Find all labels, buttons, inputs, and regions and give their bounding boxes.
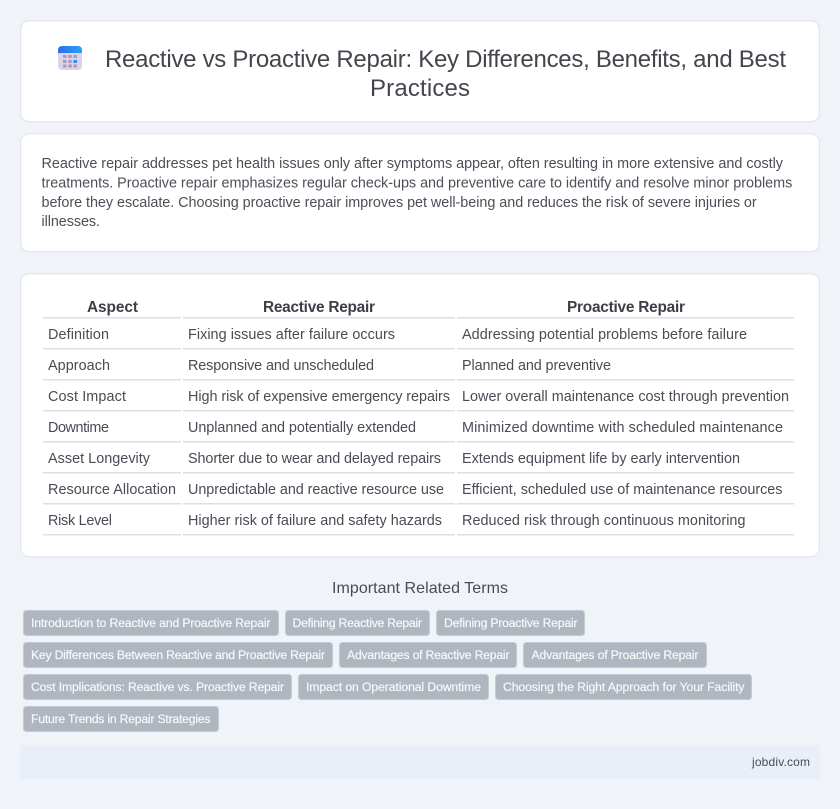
text block: introduction: before they escalate. Choosing proactive repair improves pet well-being and reduces the risk of severe injuries or — [42, 195, 757, 211]
table row: risk level: Higher risk of failure and safety hazards — [188, 513, 442, 529]
tag: Choosing the Right Approach for Your Facility — [503, 680, 745, 694]
text block: introduction — [42, 156, 792, 230]
tag — [24, 706, 218, 732]
table row: downtime: Unplanned and potentially extended — [188, 420, 416, 436]
title — [105, 46, 786, 102]
tag: Advantages of Reactive Repair — [347, 648, 510, 662]
table row: asset longevity — [48, 451, 740, 467]
table row: approach: Approach — [48, 358, 110, 374]
table header row: Proactive Repair — [567, 299, 685, 316]
table row: resource allocation — [48, 482, 782, 498]
table row: approach — [48, 358, 611, 374]
table row: asset longevity: Shorter due to wear and delayed repairs — [188, 451, 441, 467]
table header row: Reactive Repair — [263, 299, 375, 316]
tag: Key Differences Between Reactive and Proactive Repair — [31, 648, 325, 662]
text block: introduction: Reactive repair addresses pet health issues only after symptoms appear, often resulting in more extensive and costly — [42, 156, 784, 172]
table row: asset longevity: Asset Longevity — [48, 451, 151, 467]
tag list — [24, 610, 752, 732]
heading: important related terms: Important Related Terms — [332, 580, 508, 597]
tag — [286, 610, 430, 636]
table row: definition: Addressing potential problems before failure — [462, 327, 747, 343]
table row: definition: Fixing issues after failure occurs — [188, 327, 395, 343]
table row: approach: Planned and preventive — [462, 358, 611, 374]
tag: Future Trends in Repair Strategies — [31, 712, 210, 726]
tag — [24, 674, 292, 700]
title: Practices — [370, 75, 470, 102]
table row: approach: Responsive and unscheduled — [188, 358, 374, 374]
tag: Defining Reactive Repair — [292, 616, 422, 630]
table header row: Aspect — [87, 299, 138, 316]
icon: calendar — [58, 46, 82, 70]
tag: Impact on Operational Downtime — [306, 680, 481, 694]
table row: cost impact — [48, 389, 789, 405]
table header row — [87, 299, 685, 316]
tag — [496, 674, 752, 700]
table row: asset longevity: Extends equipment life by early intervention — [462, 451, 740, 467]
tag — [436, 610, 584, 636]
table row: resource allocation: Efficient, scheduled use of maintenance resources — [462, 482, 782, 498]
tag: Cost Implications: Reactive vs. Proactive Repair — [31, 680, 284, 694]
table row: downtime: Downtime — [48, 420, 109, 436]
table row: definition: Definition — [48, 327, 109, 343]
tag — [24, 610, 278, 636]
footer: jobdiv.com — [751, 755, 810, 769]
tag — [298, 674, 488, 700]
table row: resource allocation: Unpredictable and reactive resource use — [188, 482, 444, 498]
table row: risk level — [48, 513, 746, 529]
table row: downtime — [48, 420, 783, 436]
panel: header — [21, 21, 819, 122]
panel: introduction — [21, 134, 819, 252]
table row: downtime: Minimized downtime with scheduled maintenance — [462, 420, 783, 436]
table row: risk level: Reduced risk through continuous monitoring — [462, 513, 746, 529]
tag — [24, 642, 332, 668]
title: Reactive vs Proactive Repair: Key Differences, Benefits, and Best — [105, 46, 786, 73]
tag: Defining Proactive Repair — [444, 616, 578, 630]
table row: risk level: Risk Level — [48, 513, 112, 529]
tag: Introduction to Reactive and Proactive Repair — [31, 616, 270, 630]
table row: resource allocation: Resource Allocation — [48, 482, 176, 498]
tag: Advantages of Proactive Repair — [532, 648, 698, 662]
table row: cost impact: High risk of expensive emergency repairs — [188, 389, 450, 405]
footer — [20, 745, 820, 779]
table row: cost impact: Cost Impact — [48, 389, 126, 405]
text block: introduction: treatments. Proactive repair emphasizes regular check-ups and preventive care to identify and resolve minor problems — [42, 175, 792, 191]
tag — [340, 642, 516, 668]
table row: definition — [48, 327, 747, 343]
panel: comparison table — [21, 274, 819, 557]
tag — [524, 642, 706, 668]
text block: introduction: illnesses. — [42, 214, 100, 230]
table row: cost impact: Lower overall maintenance cost through prevention — [462, 389, 789, 405]
